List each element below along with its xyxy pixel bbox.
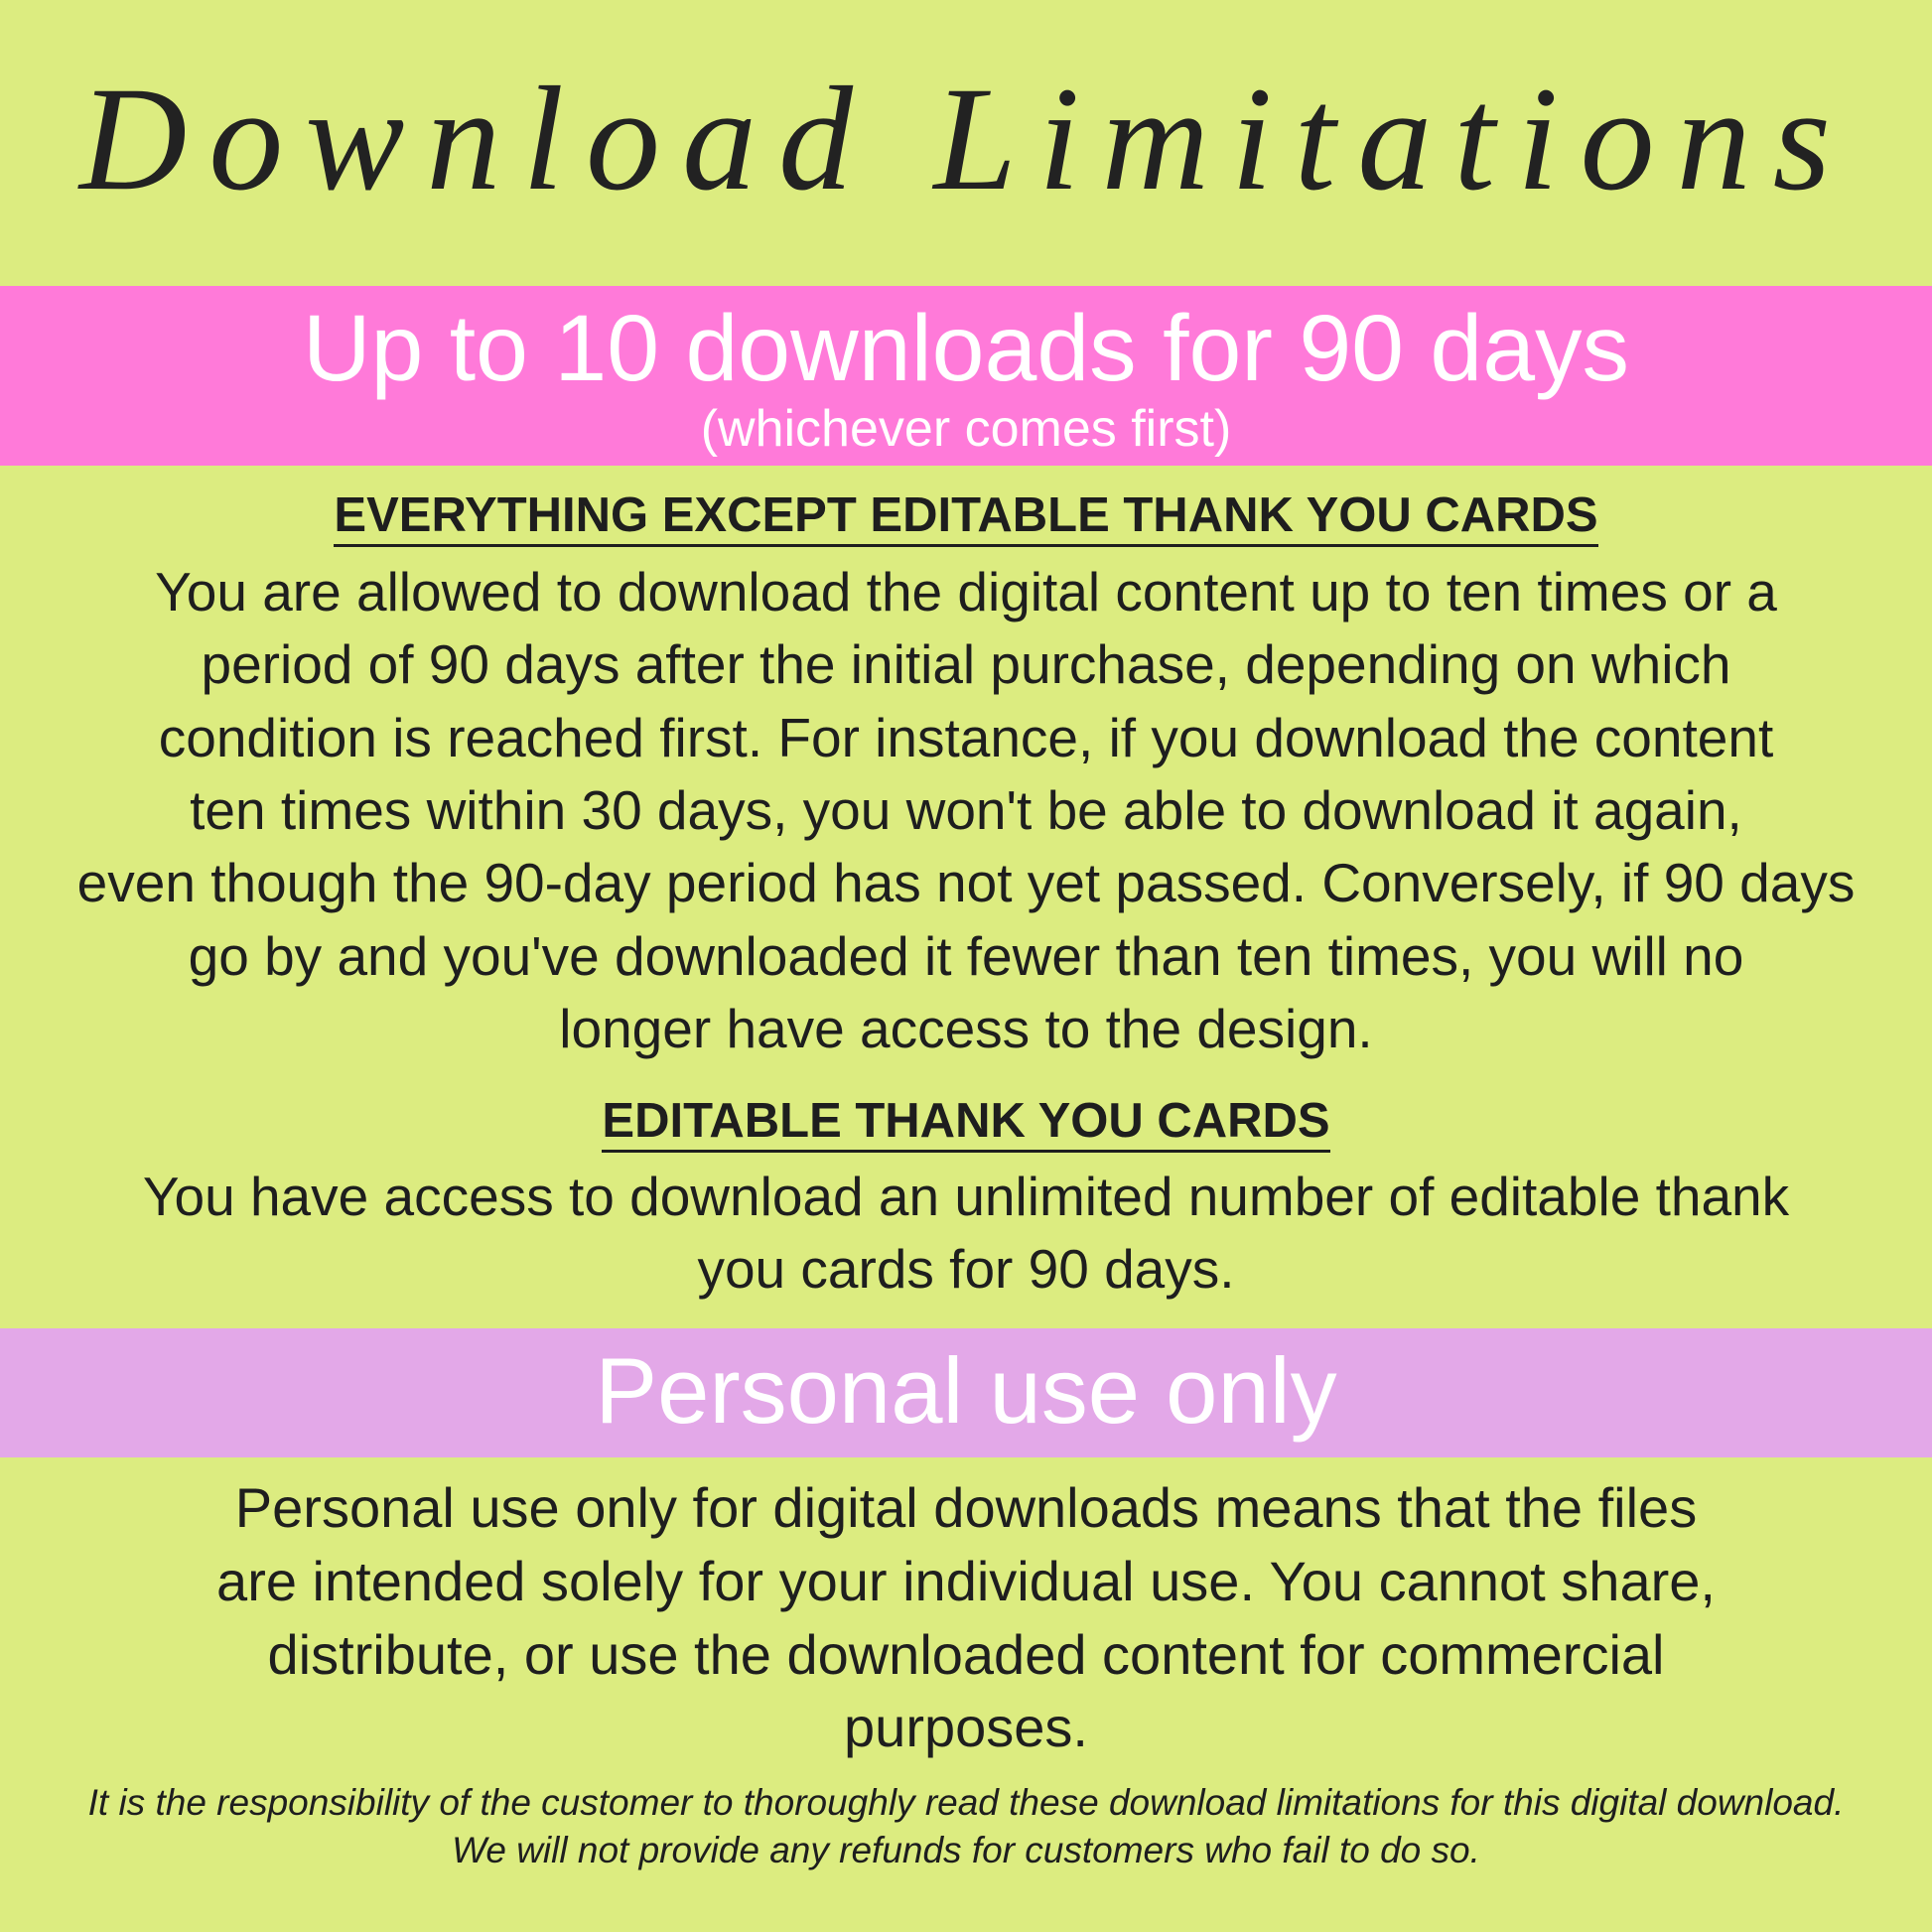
text block: download rules: ten times within 30 days, you won't be able to download it again, bbox=[190, 779, 1742, 841]
banner subtext: (whichever comes first) bbox=[701, 400, 1231, 458]
text block: download rules: go by and you've downloaded it fewer than ten times, you will no bbox=[189, 925, 1743, 987]
text block: editable cards: you cards for 90 days. bbox=[697, 1238, 1235, 1300]
heading: everything except: EVERYTHING EXCEPT EDITABLE THANK YOU CARDS bbox=[334, 488, 1598, 542]
text block: personal use: are intended solely for your individual use. You cannot share, bbox=[216, 1550, 1716, 1612]
text block: personal use: distribute, or use the downloaded content for commercial bbox=[268, 1623, 1664, 1686]
text block: personal use: Personal use only for digital downloads means that the files bbox=[235, 1476, 1697, 1539]
text block: editable cards bbox=[143, 1166, 1789, 1300]
heading: editable thank you cards: EDITABLE THANK YOU CARDS bbox=[602, 1094, 1330, 1148]
text block: editable cards: You have access to download an unlimited number of editable thank bbox=[143, 1166, 1789, 1227]
text block: download rules bbox=[77, 561, 1855, 1059]
footer disclaimer: We will not provide any refunds for customers who fail to do so. bbox=[452, 1830, 1480, 1870]
text block: personal use: purposes. bbox=[844, 1696, 1088, 1758]
banner: downloads bbox=[0, 286, 1932, 466]
banner heading: Up to 10 downloads for 90 days bbox=[303, 296, 1629, 401]
text block: download rules: period of 90 days after the initial purchase, depending on which bbox=[201, 633, 1731, 695]
text block: download rules: even though the 90-day period has not yet passed. Conversely, if 90 days bbox=[77, 852, 1855, 913]
title: Download Limitations bbox=[79, 57, 1853, 221]
footer disclaimer: It is the responsibility of the customer to thoroughly read these download limitations for this digital download. bbox=[88, 1782, 1844, 1823]
text block: download rules: condition is reached first. For instance, if you download the content bbox=[159, 707, 1773, 768]
text block: personal use bbox=[216, 1476, 1716, 1758]
banner: personal use: Personal use only bbox=[595, 1338, 1337, 1443]
footer disclaimer bbox=[88, 1782, 1844, 1870]
text block: download rules: longer have access to the design. bbox=[559, 998, 1373, 1059]
banner: personal use bbox=[0, 1328, 1932, 1457]
text block: download rules: You are allowed to download the digital content up to ten times or a bbox=[155, 561, 1777, 622]
